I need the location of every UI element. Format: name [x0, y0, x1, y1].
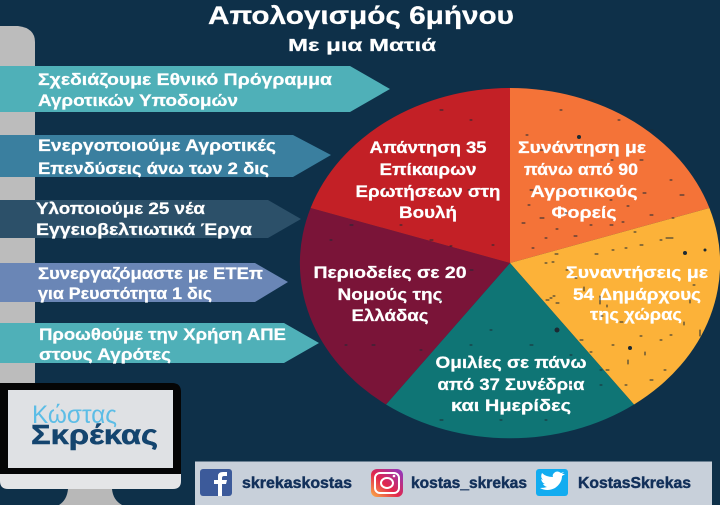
- slice: maroon: Ελλάδας: [352, 307, 428, 325]
- logo: [31, 401, 158, 450]
- instagram handle: kostas_skrekas: [411, 475, 527, 492]
- slice: red: Ερωτήσεων στη: [356, 183, 500, 201]
- slice: maroon: Περιοδείες σε 20: [314, 264, 466, 282]
- facebook handle: skrekaskostas: [242, 475, 352, 492]
- slice: teal: και Ημερίδες: [451, 397, 571, 415]
- slice: maroon: Νομούς της: [338, 286, 442, 304]
- icon: instagram: [371, 469, 403, 497]
- logo: Σκρέκας: [31, 419, 158, 450]
- arrow 1: Σχεδιάζουμε Εθνικό Πρόγραμμα: [38, 71, 332, 89]
- monitor: [0, 383, 181, 505]
- social bar: [195, 462, 712, 505]
- arrow 5: στους Αγρότες: [39, 346, 171, 364]
- arrow 4: για Ρευστότητα 1 δις: [38, 285, 212, 303]
- arrow 5: [0, 323, 319, 364]
- arrow 1: [0, 66, 390, 112]
- slice: teal: [386, 263, 634, 438]
- slice: teal: από 37 Συνέδρια: [438, 376, 584, 394]
- timeline post: [0, 26, 35, 383]
- arrow 4: Συνεργαζόμαστε με ΕΤΕπ: [38, 265, 263, 283]
- slice: red: Επίκαιρων: [380, 161, 476, 179]
- slice: yellow: 54 Δημάρχους: [573, 286, 701, 304]
- slice: red: [311, 88, 510, 263]
- slice: red: Βουλή: [399, 204, 457, 222]
- arrow 3: [0, 200, 301, 239]
- arrow 2: Επενδύσεις άνω των 2 δις: [38, 160, 269, 178]
- arrow 4: [0, 263, 288, 303]
- arrow 2: [0, 135, 331, 178]
- slice: maroon: [300, 208, 510, 404]
- slice: orange: [510, 88, 709, 263]
- slice: orange: Φορείς: [552, 204, 616, 222]
- slice: orange: Συνάντηση με: [518, 139, 646, 157]
- logo: Κώστας: [32, 401, 117, 429]
- speckle texture: [330, 100, 706, 420]
- arrow 1: Αγροτικών Υποδομών: [38, 92, 238, 110]
- slice: yellow: Συναντήσεις με: [566, 264, 708, 282]
- pie chart: [300, 88, 720, 438]
- arrow 5: Προωθούμε την Χρήση ΑΠΕ: [39, 326, 286, 344]
- slice: orange: πάνω από 90: [524, 161, 638, 179]
- arrow 2: Ενεργοποιούμε Αγροτικές: [38, 137, 276, 155]
- icon: facebook: [200, 469, 232, 496]
- subtitle: Με μια Ματιά: [288, 35, 436, 55]
- slice: yellow: [510, 208, 720, 404]
- slice: orange: Αγροτικούς: [530, 183, 638, 201]
- slice: teal: Ομιλίες σε πάνω: [436, 354, 587, 372]
- arrow 3: Εγγειοβελτιωτικά Έργα: [36, 221, 252, 239]
- slice: yellow: της χώρας: [590, 306, 682, 324]
- arrow 3: Υλοποιούμε 25 νέα: [36, 200, 205, 218]
- title: [208, 2, 514, 55]
- icon: twitter: [536, 469, 568, 496]
- slice: red: Απάντηση 35: [370, 139, 486, 157]
- twitter handle: KostasSkrekas: [578, 475, 691, 492]
- title: Απολογισμός 6μήνου: [208, 2, 514, 30]
